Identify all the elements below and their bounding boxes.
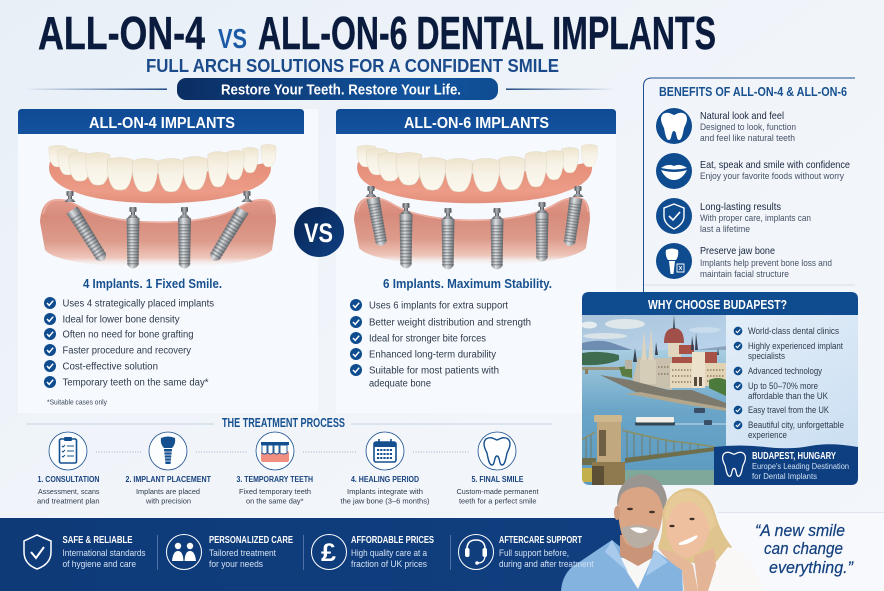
parliament building — [619, 315, 726, 396]
photo: budapest parliament and chain bridge — [581, 315, 726, 485]
benefit: natural look: Natural look and feel — [700, 110, 784, 122]
benefit: confidence — [656, 153, 850, 189]
all-on-6 heading — [336, 109, 616, 134]
budapest heading: WHY CHOOSE BUDAPEST? — [648, 297, 787, 312]
step 1: consultation — [37, 432, 100, 506]
panel: all-on-4 — [18, 109, 318, 413]
budapest checklist: specialists — [748, 351, 786, 361]
footer: safe and reliable — [24, 535, 146, 569]
benefit: confidence: Eat, speak and smile with confidence — [700, 159, 850, 171]
footer: aftercare support: Full support before, — [499, 548, 569, 558]
benefit: long-lasting: Long-lasting results — [700, 201, 781, 213]
quote: “A new smile — [755, 522, 845, 540]
footer: affordable prices: AFFORDABLE PRICES — [351, 535, 434, 546]
subtitle: FULL ARCH SOLUTIONS FOR A CONFIDENT SMILE — [146, 56, 559, 76]
all-on-6 checklist: Uses 6 implants for extra support — [369, 300, 508, 312]
woman hair back — [658, 488, 732, 566]
step 2: implant placement: Implants are placed — [136, 487, 200, 496]
title — [38, 7, 716, 59]
all-on-6 checklist: adequate bone — [369, 378, 431, 390]
all-on-6 checklist: Enhanced long-term durability — [369, 350, 496, 360]
footer: personalized care — [166, 534, 293, 570]
benefit: confidence: Enjoy your favorite foods without worry — [700, 171, 844, 182]
panel: all-on-6 — [336, 109, 616, 413]
woman head — [665, 500, 710, 558]
step 3: temporary teeth — [236, 432, 313, 506]
all-on-4 heading: ALL-ON-4 IMPLANTS — [89, 115, 235, 132]
step 2: implant placement: with precision — [145, 496, 191, 506]
footer: affordable prices — [312, 534, 434, 570]
woman top and arm — [707, 547, 763, 591]
chain bridge — [622, 430, 715, 447]
benefit: long-lasting — [656, 198, 811, 235]
all-on-4 tagline: 4 Implants. 1 Fixed Smile. — [83, 276, 222, 291]
tagline pill: Restore Your Teeth. Restore Your Life. — [221, 82, 461, 98]
all-on-4 checklist: Cost-effective solution — [62, 362, 158, 372]
benefit: natural look — [656, 108, 796, 144]
footer: affordable prices: £ — [321, 539, 336, 567]
benefit: natural look: and feel like natural teeth — [700, 133, 795, 144]
panel: why choose budapest — [581, 292, 858, 485]
budapest checklist: Beautiful city, unforgettable — [748, 420, 844, 430]
title: ALL-ON-4 — [38, 7, 205, 59]
budapest checklist — [734, 326, 844, 440]
footer: personalized care: Tailored treatment — [209, 548, 276, 558]
step 1: consultation: 1. CONSULTATION — [38, 474, 100, 484]
all-on-4 checklist: Often no need for bone grafting — [62, 330, 194, 340]
quote: everything.” — [769, 559, 854, 577]
footer: safe and reliable: SAFE & RELIABLE — [62, 535, 133, 546]
process heading: THE TREATMENT PROCESS — [222, 416, 345, 430]
step 2: implant placement — [126, 432, 212, 506]
all-on-6 heading: ALL-ON-6 IMPLANTS — [404, 115, 549, 132]
all-on-4 checklist: Uses 4 strategically placed implants — [62, 298, 214, 310]
benefit: natural look: Designed to look, function — [700, 122, 796, 133]
footnote: *Suitable cases only — [47, 398, 107, 406]
illustration: all-on-4 jaw with 4 implants — [40, 144, 276, 268]
all-on-4 checklist: Temporary teeth on the same day* — [62, 378, 209, 388]
step 1: consultation: and treatment plan — [37, 496, 100, 506]
footer: aftercare support: AFTERCARE SUPPORT — [499, 535, 582, 546]
step 4: healing period: the jaw bone (3–6 months) — [340, 496, 430, 506]
step 1: consultation: Assessment, scans — [38, 487, 100, 496]
all-on-6 checklist: Suitable for most patients with — [369, 366, 499, 376]
budapest checklist: World-class dental clinics — [748, 326, 840, 336]
footer: aftercare support — [458, 534, 594, 570]
footer: safe and reliable: of hygiene and care — [62, 559, 136, 569]
footer: affordable prices: High quality care at a — [351, 548, 428, 558]
step 5: final smile: teeth for a perfect smile — [459, 496, 536, 506]
budapest checklist: affordable than the UK — [748, 391, 828, 401]
budapest callout: BUDAPEST, HUNGARY — [752, 450, 836, 462]
footer band — [0, 518, 622, 591]
tagline pill — [24, 78, 616, 100]
title: VS — [218, 23, 247, 54]
woman neck — [694, 548, 716, 591]
man shirt — [561, 540, 683, 591]
budapest checklist: Up to 50–70% more — [748, 381, 818, 391]
all-on-4 checklist: Ideal for lower bone density — [62, 314, 180, 326]
budapest callout — [714, 444, 858, 485]
benefits heading: BENEFITS OF ALL-ON-4 & ALL-ON-6 — [659, 85, 847, 99]
benefit: long-lasting: With proper care, implants can — [700, 213, 811, 224]
vs badge — [294, 207, 344, 257]
all-on-6 checklist: Ideal for stronger bite forces — [369, 334, 486, 344]
all-on-6 checklist: Better weight distribution and strength — [369, 318, 531, 328]
man head — [618, 485, 663, 548]
panel: benefits — [644, 78, 855, 292]
budapest heading — [582, 292, 858, 315]
step 3: temporary teeth: on the same day* — [246, 496, 304, 506]
benefit: jaw bone: Preserve jaw bone — [700, 245, 775, 257]
step 4: healing period: 4. HEALING PERIOD — [351, 474, 419, 484]
all-on-4 checklist: Faster procedure and recovery — [62, 346, 191, 356]
all-on-6 tagline: 6 Implants. Maximum Stability. — [383, 276, 552, 291]
budapest checklist: Highly experienced implant — [748, 341, 843, 351]
benefit: jaw bone: maintain facial structure — [700, 269, 789, 280]
budapest checklist: experience — [748, 430, 787, 440]
footer benefits — [24, 534, 594, 570]
benefit: jaw bone — [656, 243, 832, 280]
panel: treatment process — [26, 416, 552, 506]
all-on-6 checklist — [350, 299, 531, 390]
benefit: jaw bone: Implants help prevent bone loss and — [700, 258, 832, 269]
footer: aftercare support: during and after treatment — [499, 559, 594, 569]
step 2: implant placement: 2. IMPLANT PLACEMENT — [126, 474, 212, 484]
footer: affordable prices: fraction of UK prices — [351, 559, 427, 569]
step 5: final smile: Custom-made permanent — [456, 487, 539, 496]
vs badge: VS — [304, 218, 333, 248]
budapest checklist: Easy travel from the UK — [748, 405, 829, 415]
footer: safe and reliable: International standards — [62, 548, 146, 558]
step 5: final smile — [456, 432, 539, 506]
benefit: long-lasting: last a lifetime — [700, 224, 750, 235]
step 5: final smile: 5. FINAL SMILE — [472, 474, 524, 484]
budapest callout: Europe's Leading Destination — [752, 461, 849, 471]
illustration: all-on-6 jaw with 6 implants — [354, 144, 597, 270]
all-on-4 checklist — [44, 297, 214, 388]
step 4: healing period: Implants integrate with — [347, 487, 423, 496]
all-on-4 heading — [18, 109, 304, 134]
budapest callout: for Dental Implants — [752, 471, 817, 481]
quote: can change — [764, 540, 843, 558]
embankment — [600, 375, 726, 411]
step 3: temporary teeth: 3. TEMPORARY TEETH — [236, 474, 313, 484]
step 3: temporary teeth: Fixed temporary teeth — [239, 487, 311, 496]
footer: personalized care: PERSONALIZED CARE — [209, 535, 293, 546]
photo: smiling couple — [561, 474, 763, 591]
man neck — [620, 535, 655, 566]
quote — [755, 522, 854, 577]
step 4: healing period — [340, 432, 430, 506]
footer: personalized care: for your needs — [209, 559, 263, 569]
quote background — [718, 512, 884, 591]
boats — [635, 422, 675, 426]
budapest checklist: Advanced technology — [748, 366, 823, 376]
